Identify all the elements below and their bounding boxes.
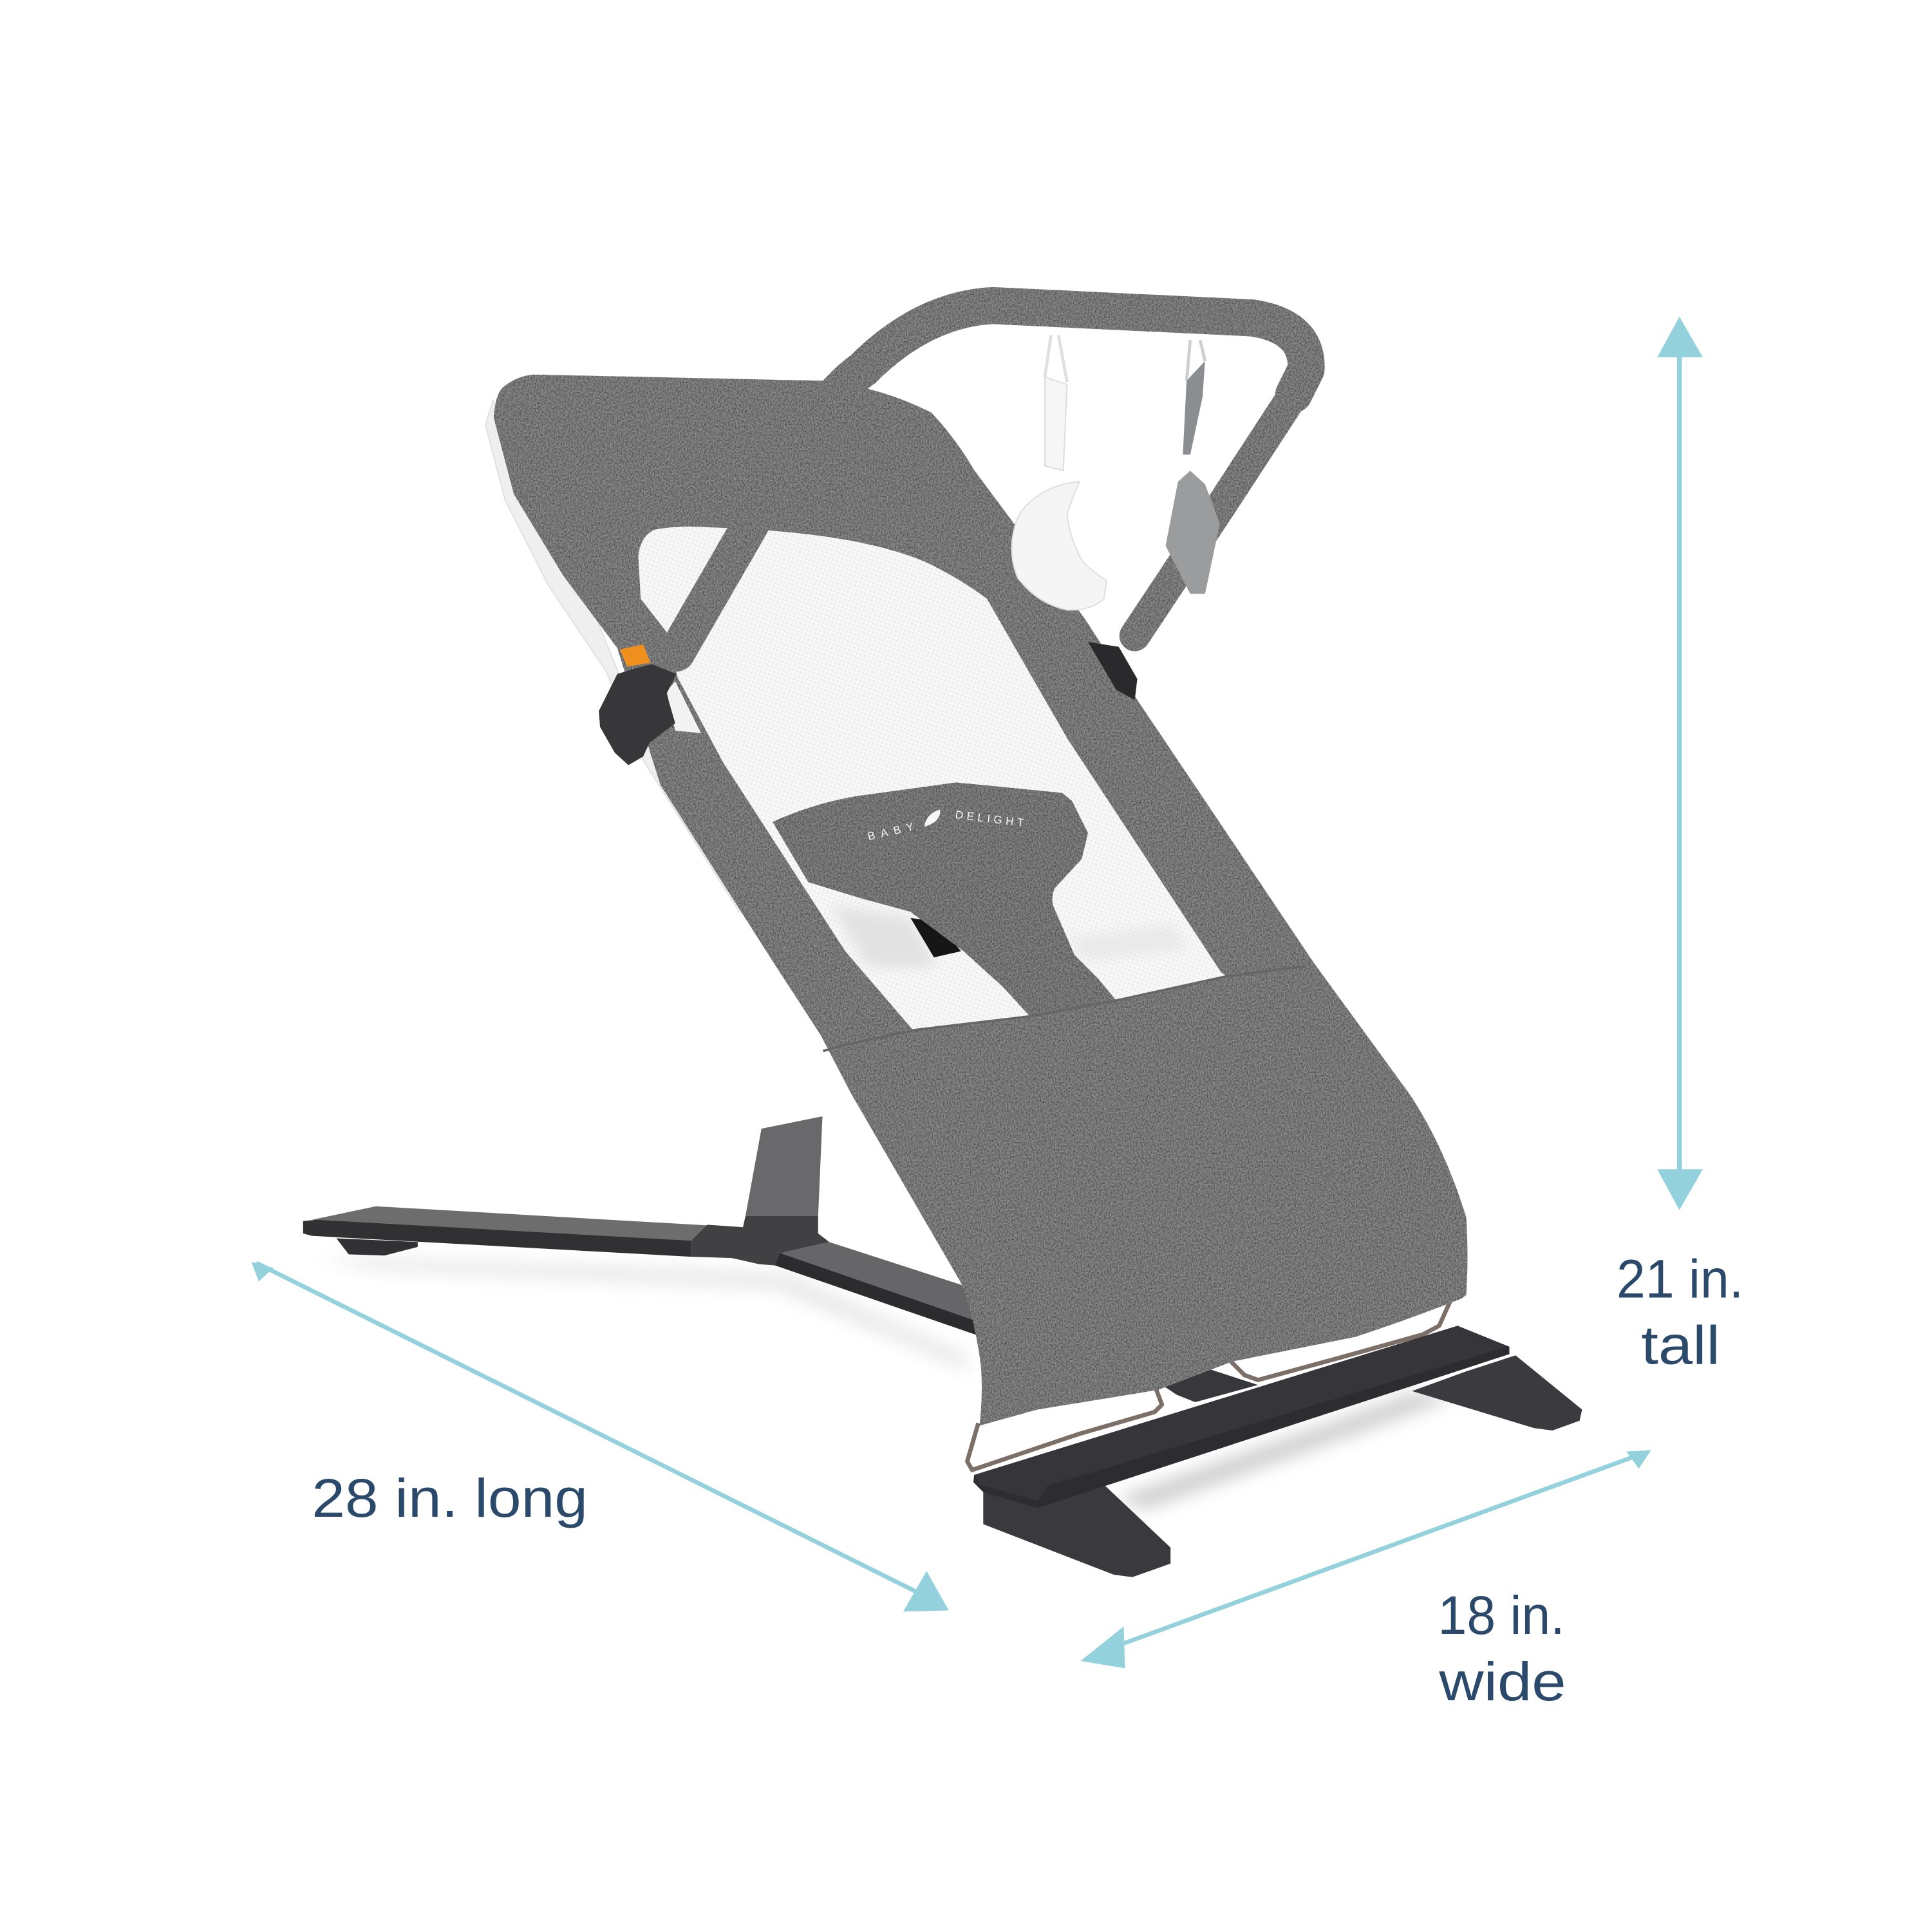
label: height: [1617, 1248, 1743, 1376]
base: left arm side: [303, 1220, 691, 1257]
base: rubber pad: [336, 1238, 418, 1255]
base: left arm top: [312, 1206, 708, 1241]
product: baby bouncer: [303, 306, 1582, 1577]
care label: [666, 681, 701, 733]
front bar top face: [975, 1326, 1507, 1501]
mesh shading: [832, 906, 1189, 967]
brand logo on harness: BABY: [867, 820, 915, 843]
base: right arm top: [780, 1242, 976, 1321]
base: right arm side: [775, 1251, 979, 1336]
arrow: length: [251, 1262, 949, 1611]
front bar: [973, 1326, 1510, 1508]
label: width: 18 in.: [1438, 1585, 1565, 1646]
right foot: [1412, 1355, 1582, 1430]
label: height: 21 in.: [1617, 1248, 1743, 1309]
base: rear arm: [746, 1116, 823, 1216]
black buckle strap: [910, 918, 961, 957]
arrow: height: [1657, 317, 1703, 1210]
base frame: [303, 1116, 979, 1336]
arrow: width: [1080, 1450, 1651, 1668]
seat back mesh edge: [485, 400, 754, 918]
brand logo on harness: [867, 808, 1025, 843]
toy: gray star: [1166, 340, 1220, 594]
seat fabric: [494, 375, 1467, 1425]
lower panel seam: [823, 966, 1306, 1051]
label: height: tall: [1641, 1315, 1720, 1376]
right hinge clasp: [1088, 642, 1138, 700]
seat mesh insert: [638, 527, 1226, 1030]
label: length: 28 in. long: [312, 1468, 588, 1528]
warning tag: [620, 644, 651, 666]
arch bar: [677, 306, 1306, 653]
right wire frame: [1231, 1301, 1450, 1380]
floor shadows: [323, 1257, 1454, 1510]
left hinge clasp: [599, 664, 677, 765]
brand logo on harness: DELIGHT: [955, 808, 1025, 829]
left foot: [983, 1483, 1170, 1577]
base: hub: [691, 1216, 829, 1266]
toy: moon: [1011, 335, 1107, 610]
label: width: [1438, 1585, 1566, 1712]
label: width: wide: [1438, 1651, 1566, 1712]
left wire frame: [967, 1385, 1162, 1470]
harness: [773, 782, 1116, 1015]
cross bar: [1162, 1369, 1258, 1402]
